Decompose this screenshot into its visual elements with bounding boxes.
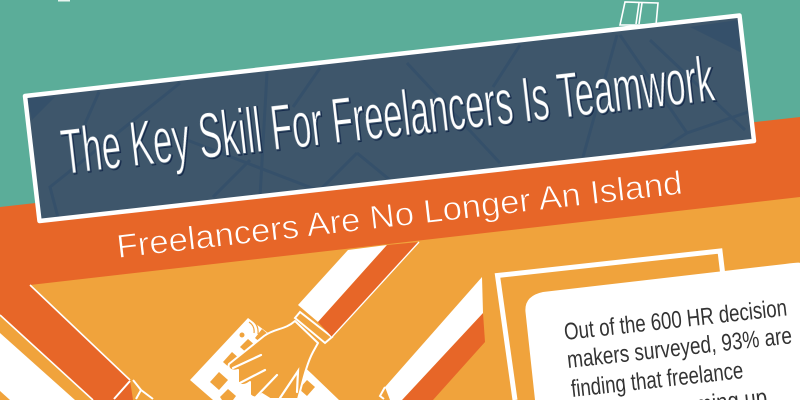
hand <box>229 321 318 399</box>
left sleeve edge lines <box>0 285 130 400</box>
third sleeve orange <box>402 313 485 400</box>
panel: text card <box>498 251 800 400</box>
right cuff <box>295 312 332 343</box>
dark orange band <box>0 117 800 400</box>
keyboard <box>190 318 339 400</box>
top left fragment <box>58 0 70 2</box>
third sleeve white <box>385 277 483 400</box>
right arm with hand over keyboard <box>190 242 419 400</box>
banner pattern <box>27 20 748 225</box>
left sleeve white <box>0 333 75 400</box>
banner fill <box>25 16 754 221</box>
left arm <box>0 285 153 400</box>
icon: clipboard peeking above banner <box>620 2 658 25</box>
left cuff <box>114 380 153 399</box>
light orange field <box>30 197 800 400</box>
third cuff <box>380 387 385 399</box>
white card <box>525 263 800 400</box>
right sleeve white <box>298 245 387 322</box>
third arm <box>380 277 485 400</box>
frame <box>498 251 722 400</box>
title banner <box>25 16 754 225</box>
left arm lower field <box>0 315 93 400</box>
banner border <box>25 16 754 221</box>
right sleeve orange <box>318 242 419 337</box>
subtitle: Freelancers Are No Longer An Island <box>115 164 684 265</box>
body text <box>563 295 793 400</box>
